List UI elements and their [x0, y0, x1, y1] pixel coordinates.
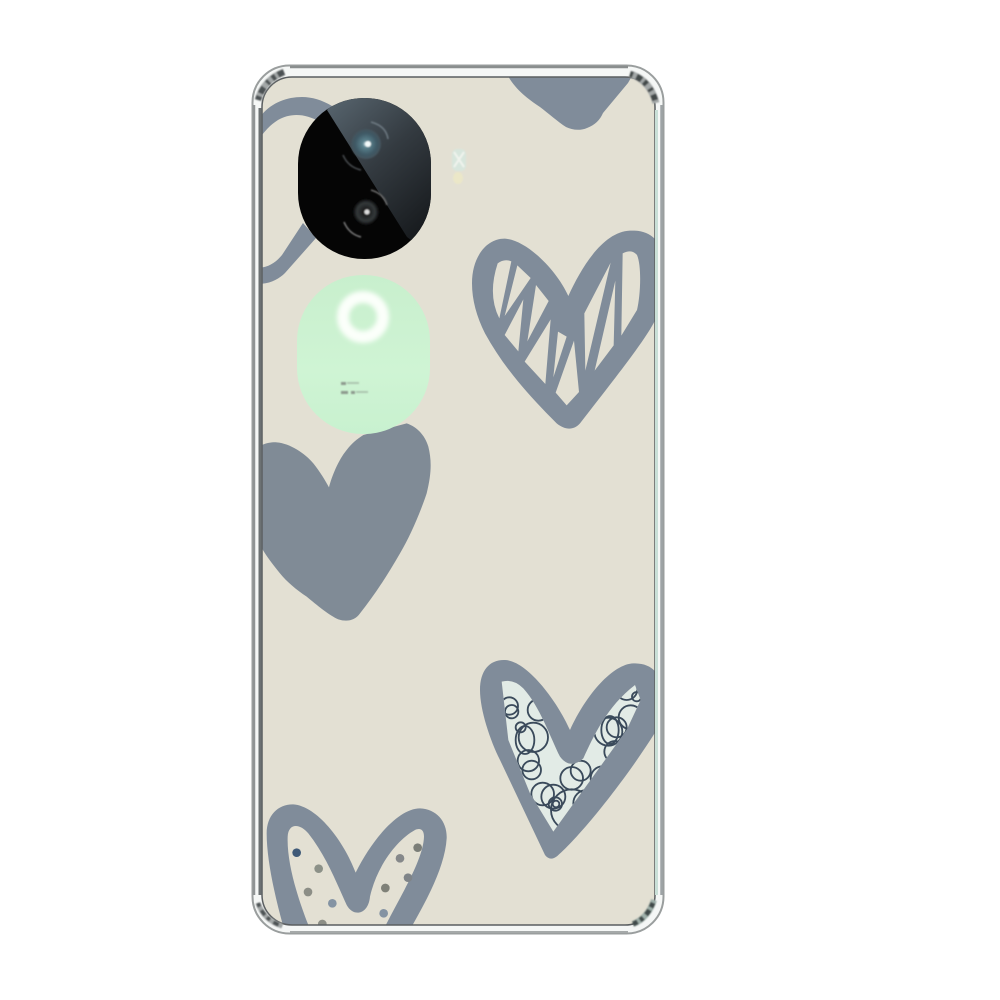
case rim fill — [252, 66, 664, 934]
phone case illustration — [252, 64, 664, 934]
flash — [452, 149, 466, 184]
heart: top cropped solid — [508, 76, 632, 130]
heart: dotted — [267, 804, 447, 928]
camera module — [298, 98, 431, 259]
heart: solid large — [257, 423, 431, 621]
hearts artwork — [257, 76, 657, 928]
lens: lower — [344, 190, 387, 237]
glowing ring — [343, 297, 383, 337]
heart: top left outline — [258, 97, 332, 284]
polka dots — [292, 843, 422, 928]
scribble loops — [504, 688, 640, 826]
case corner bumpers — [258, 72, 656, 926]
camera glass reflection — [327, 98, 431, 240]
case back panel — [262, 77, 655, 925]
heart: striped — [472, 231, 657, 429]
module fine print — [341, 382, 368, 394]
lens: upper — [343, 122, 388, 170]
heart: scribble — [480, 660, 657, 859]
case rim lines — [254, 67, 662, 932]
mint ring module — [297, 275, 430, 434]
